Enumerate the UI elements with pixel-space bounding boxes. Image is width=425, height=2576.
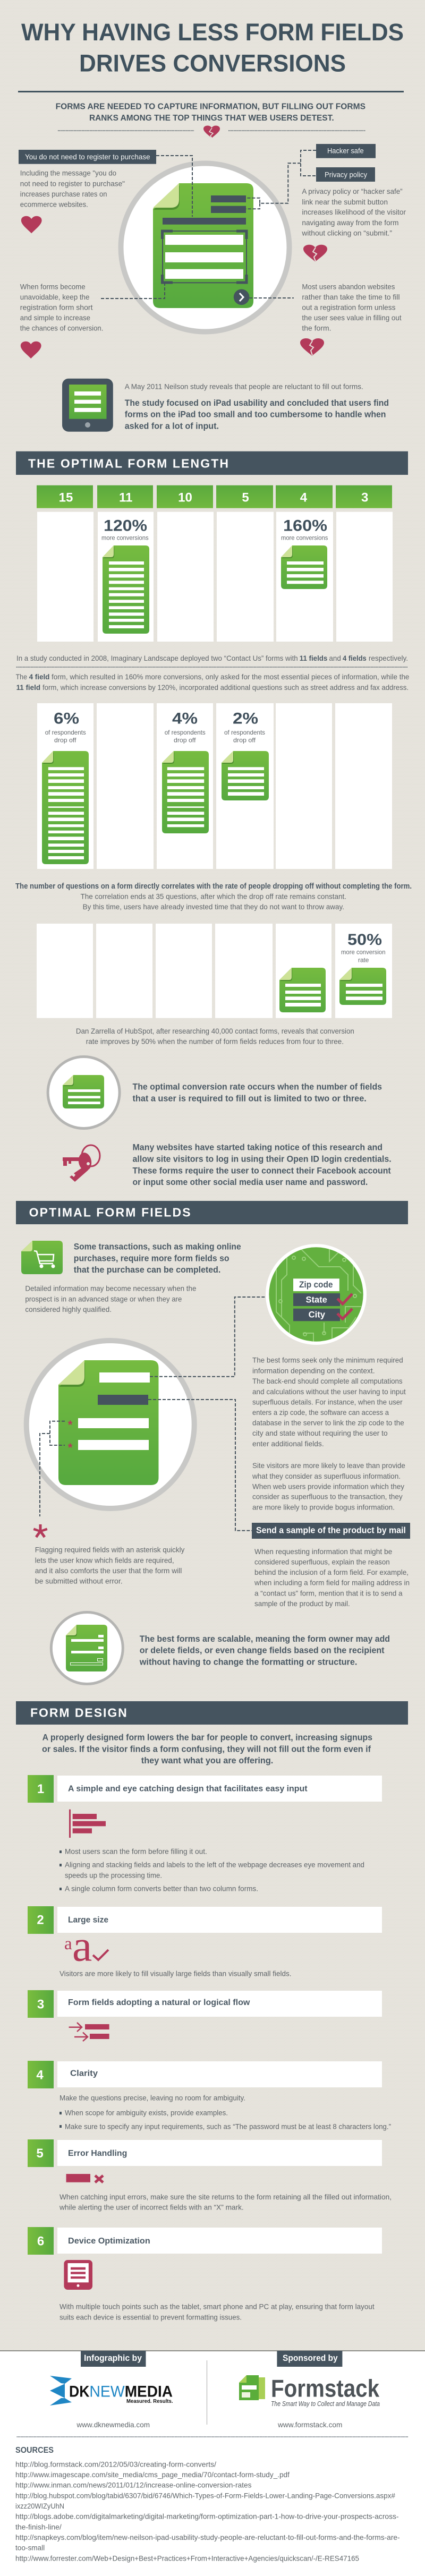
text: scalable forms [139,1634,390,1667]
stat: 50%: rate [358,956,369,963]
stat: 4%: of respondents [165,729,206,736]
stat: 120%: more conversions [101,534,149,542]
text: source links: http://www.imagescape.com/site_media/cms_page_media/70/contact-form-study_.pdf [15,2470,290,2479]
icon: three field form [339,968,386,1005]
stat: 120%: 120% [104,517,147,534]
logo: DK New Media: MEDIA [125,2383,173,2400]
text: superfluous explanation: considered superfluous, explain the reason [254,1558,390,1566]
logo: DK New Media: NEW [89,2383,125,2400]
text: best forms: consider as superfluous to the transaction, they [252,1492,403,1501]
stat: 4% [165,710,206,744]
field: state [293,1293,340,1306]
stat: 160% [281,517,328,542]
required asterisks: * [68,1441,73,1454]
stat: 2%: of respondents [224,729,265,736]
text: form design intro: A properly designed form lowers the bar for people to convert, increasing signups [42,1733,372,1743]
text: best forms: city and state without requiring the user to [252,1429,388,1437]
text: error handling [59,2193,392,2212]
text: users abandon: rather than take the time to fill [302,293,400,301]
text: source links: http://www.inman.com/news/2011/01/12/increase-online-conversion-rates [15,2481,252,2489]
text: footer urls [76,2420,342,2429]
required asterisks: * [68,1418,73,1431]
field: state: State [306,1295,327,1304]
icon: arrows to fields [69,2023,109,2041]
step 4 heading: 4 [36,2068,44,2082]
text: best forms: enter additional fields. [252,1439,324,1448]
text: best forms [252,1356,406,1512]
text: privacy policy: without clicking on “submit.” [301,229,392,237]
field: city: City [309,1310,326,1319]
text: superfluous explanation [254,1547,410,1608]
chart: conversion rate columns [37,924,392,1018]
icon: short form [222,751,269,800]
text: drop off correlation: The correlation ends at 35 questions, after which the drop off rate remains constant. [81,892,346,901]
subtitle [56,103,366,123]
text: keep form short: registration form short [20,303,93,311]
section heading: form design: FORM DESIGN [30,1706,127,1720]
text: optimal conversion rate [133,1082,382,1103]
text: privacy policy: link near the submit button [302,198,388,206]
text: step 1 bullets [60,1847,364,1893]
icon: left aligned bars [69,1810,106,1838]
step 1 heading: 1 [37,1782,44,1796]
text: Nielson study: forms on the iPad too small and too cumbersome to handle when [125,410,386,420]
text: imaginary landscape study: In a study conducted in 2008, Imaginary Landscape deployed two “Contact Us” forms with [16,654,298,662]
stat: 2%: drop off [233,737,256,744]
text: register message: not need to register to purchase" [20,180,125,188]
callout: send a sample [252,1523,410,1539]
text: register message: Including the message "you do [20,169,116,177]
label: infographic by: Infographic by [84,2353,142,2363]
icon: four field form [279,968,326,1012]
text: clarity: When scope for ambiguity exists, provide examples. [65,2109,228,2117]
text: best forms: database in the server to link the zip code to the [252,1418,404,1427]
subtitle: RANKS AMONG THE TOP THINGS THAT WEB USERS DETEST. [89,114,334,123]
text: keep form short: When forms become [20,282,86,291]
text: privacy policy: A privacy policy or “hacker safe” [302,187,403,195]
text: footer urls: www.dknewmedia.com [76,2420,150,2429]
text: detailed information: considered highly qualified. [25,1305,112,1313]
icon: heart [21,216,42,233]
text: users abandon: the form. [302,324,332,332]
icon: asterisk [33,1524,48,1538]
text: error handling: When catching input errors, make sure the site returns to the form retaining all the filled out information, [60,2193,392,2201]
text: register message: ecommerce websites. [20,200,88,209]
chart: field count headers: 3 [361,491,368,505]
label: privacy policy: Privacy policy [325,170,367,178]
text: field comparison: 11 field [16,683,40,692]
icon: tall form [42,751,89,864]
chart: drop off columns [37,703,392,869]
stat: 6%: drop off [54,737,76,744]
step 2 heading: Large size [68,1915,108,1924]
step 6 heading: Device Optimization [68,2237,150,2246]
icon: form with 11 fields [103,545,149,634]
text: online purchases: Some transactions, such as making online [74,1242,241,1252]
stat: 2% [224,710,265,744]
text: best forms: Site visitors are more likely to leave than provide [252,1461,405,1470]
step 1 heading: A simple and eye catching design that facilitates easy input [68,1785,308,1794]
text: keep form short: the chances of conversion. [20,324,103,332]
text: keep form short: and simple to increase [20,313,90,322]
field: city [293,1309,340,1321]
section heading: the optimal form length: THE OPTIMAL FORM LENGTH [28,456,228,470]
text: flagging required fields: and it also comforts the user that the form will [35,1566,182,1575]
text: best forms: and calculations without the user having to input [252,1387,406,1396]
logo: Formstack [239,2374,380,2408]
text: users abandon: Most users abandon websites [302,282,395,291]
text: step 1 bullets: Aligning and stacking fields and labels to the left of the webpage decreases eye movement and [65,1861,364,1869]
green form document [153,183,253,308]
step 4 heading: Clarity [70,2069,98,2078]
field: zip code: Zip code [299,1280,333,1290]
text: Nielson study: A May 2011 Neilson study reveals that people are reluctant to fill out forms. [125,382,363,391]
text: Dan Zarrella: rate improves by 50% when the number of form fields reduces from four to three. [86,1037,344,1046]
text: privacy policy: navigating away from the form [302,218,398,227]
text: scalable forms: without having to change the formatting or structure. [139,1657,357,1667]
section heading: optimal form fields: OPTIMAL FORM FIELDS [29,1206,191,1219]
text: open id [133,1143,392,1187]
icon: tablet [62,379,113,432]
text: privacy policy [301,187,406,237]
text: clarity [60,2094,391,2130]
label: privacy policy [316,167,375,182]
step 2 heading [28,1906,382,1934]
text: best forms: what they consider as superfluous information. [252,1472,401,1480]
icon: small and large a with check [64,1922,108,1971]
text: users abandon [302,282,402,332]
panel: footer [0,2350,425,2576]
stat: 4%: drop off [174,737,196,744]
text: keep form short [20,282,103,332]
text: flagging required fields: Flagging required fields with an asterisk quickly [35,1546,184,1554]
stat: 50%: more conversion [341,949,386,956]
chart: field count headers: 5 [242,491,249,505]
text: detailed information: Detailed information may become necessary when the [25,1284,197,1293]
step 5 heading [28,2139,382,2167]
text: register message: increases purchase rates on [20,190,107,198]
text: imaginary landscape study: 4 fields [343,654,367,662]
text: best forms: The best forms seek only the minimum required [252,1356,403,1364]
label: hacker safe: Hacker safe [327,146,364,155]
text: device optimization: suits each device is essential to prevent formatting issues. [60,2313,242,2321]
title rule [18,91,404,92]
text: scalable forms: or delete fields, or even change fields based on the recipient [140,1646,385,1656]
text: online purchases [74,1242,241,1275]
callout: send a sample: Send a sample of the product by mail [256,1526,406,1536]
chart: field count headers: 15 [59,491,73,505]
icon: heart [21,342,41,359]
text: imaginary landscape study: 11 fields [300,654,327,662]
stat: 2%: 2% [233,710,258,727]
logo: DK New Media: Measured. Results. [126,2399,173,2404]
text: step 1 bullets: A single column form converts better than two column forms. [65,1884,258,1893]
icon: broken heart divider [203,125,220,138]
icon: shopping cart form [21,1241,63,1274]
text: field comparison: form, which increase conversions by 120%, incorporated additional questions such as street address and fax address. [42,683,409,692]
chart: field count headers: 11 [119,491,132,505]
icon: field with x [66,2174,103,2182]
icon: circled three field form [48,1057,120,1128]
text: field comparison: form, which resulted in 160% more conversions, only asked for the most essential pieces of information, while the [52,672,410,681]
icon: scalable form circle [51,1613,123,1684]
subtitle: FORMS ARE NEEDED TO CAPTURE INFORMATION, BUT FILLING OUT FORMS [56,103,366,112]
field: zip code [293,1278,339,1291]
text: source links: http://blog.formstack.com/2012/05/03/creating-form-converts/ [15,2460,216,2468]
text: optimal conversion rate: The optimal conversion rate occurs when the number of fields [133,1082,382,1092]
icon: broken heart [300,338,324,356]
logo: DK New Media: DK [69,2383,90,2400]
text: Nielson study: asked for a lot of input. [125,421,219,431]
text: drop off correlation [15,882,412,911]
required asterisks [68,1418,73,1454]
text: clarity: Make the questions precise, leaving no room for ambiguity. [60,2094,245,2102]
icon: keys [63,1145,100,1182]
text: source links: ixzz20WIZyUhN [15,2502,64,2510]
text: source links: http://blog.hubspot.com/blog/tabid/6307/bid/6746/Which-Types-of-Form-Fields-Lower-Landing-Page-Conversions.aspx# [15,2491,395,2500]
text: flagging required fields: be submitted without error. [35,1577,123,1585]
text: best forms: The back-end should complete all computations [252,1377,403,1385]
label: infographic by [81,2351,146,2367]
label: hacker safe [316,144,376,158]
label: sponsored by: Sponsored by [283,2353,338,2363]
stat: 6%: of respondents [45,729,86,736]
text: field comparison [16,672,410,692]
text: Dan Zarrella [76,1027,354,1046]
label: you do not need to register [19,150,156,164]
stat: 6% [45,710,86,744]
text: users abandon: the user sees value in filling out [302,313,402,322]
chart: field count headers [37,485,392,508]
text: source links: the-finish-line/ [15,2522,62,2531]
panel: large form circle [27,1341,194,1508]
step 4 heading [28,2061,382,2088]
text: keep form short: unavoidable, keep the [20,293,90,301]
text: users abandon: out a registration form unless [302,303,395,311]
text: register message [20,169,125,209]
text: large fields: Visitors are more likely to fill visually large fields than visually small fields. [60,1969,291,1978]
label: sponsored by [277,2351,342,2367]
stat: 160%: more conversions [281,534,328,542]
stat: 50%: 50% [347,931,382,949]
text: flagging required fields: lets the user know which fields are required, [35,1556,174,1564]
step 1 heading [28,1775,382,1803]
text: open id: These forms require the user to connect their Facebook account [133,1166,391,1175]
step 6 heading: 6 [37,2234,44,2248]
logo: Formstack: The Smart Way to Collect and Manage Data [271,2400,380,2408]
stat: 120% [101,517,149,542]
text: step 1 bullets: speeds up the processing time. [65,1871,162,1880]
text: drop off correlation: By this time, users have already invested time that they do not want to throw away. [83,902,344,911]
icon: red tablet [64,2260,92,2290]
green form document [58,1360,158,1485]
text: clarity: Make sure to specify any input requirements, such as “The password must be at least 8 characters long.” [65,2122,391,2130]
label: you do not need to register: You do not need to register to purchase [25,152,150,161]
icon: broken heart [303,245,327,262]
text: form design intro: or sales. If the visitor finds a form confusing, they will not fill out the form even if [42,1744,371,1754]
text: imaginary landscape study: and [329,654,341,662]
step 5 heading: 5 [36,2146,44,2161]
text: best forms: enters a zip code, the software can access a [252,1408,389,1417]
text: Dan Zarrella: Dan Zarrella of HubSpot, after researching 40,000 contact forms, reveals that conversion [76,1027,354,1035]
icon: checks [337,1294,352,1319]
connector dashes [101,150,316,298]
section heading: form design [16,1701,408,1725]
text: form design intro [42,1733,372,1765]
panel: form diagram circle [121,164,289,331]
text: form design intro: they want what you are offering. [141,1756,273,1765]
text: device optimization: With multiple touch points such as the tablet, smart phone and PC at play, ensuring that form layout [60,2302,375,2311]
chart: field count headers: 4 [300,491,308,505]
text: online purchases: that the purchase can be completed. [74,1265,220,1275]
text: Nielson study [125,382,389,431]
text: superfluous explanation: sample of the product by mail. [254,1599,350,1608]
step 5 heading: Error Handling [68,2149,127,2158]
text: scalable forms: The best forms are scalable, meaning the form owner may add [140,1634,390,1644]
text: best forms: are more likely to provide bogus information. [252,1503,395,1512]
step 6 heading [28,2227,382,2255]
section heading: optimal form fields [16,1201,408,1224]
text: source links: http://blogs.adobe.com/digitalmarketing/digital-marketing/form-optimization-part-1-how-to-drive-your-prospects-across- [15,2512,399,2521]
text: source links [15,2460,400,2562]
text: superfluous explanation: a “contact us” form, mention that it is to send a [254,1589,403,1598]
text: field comparison: 4 field [29,672,49,681]
text: open id: or input some other social media user name and password. [133,1178,368,1187]
step 3 heading [28,1990,382,2018]
text: optimal conversion rate: that a user is required to fill out is limited to two or three. [133,1094,367,1103]
chart: conversion columns [37,512,393,642]
connector dashes [40,1297,265,1531]
text: detailed information: prospect is in an advanced stage or when they are [25,1295,182,1303]
text: superfluous explanation: behind the inclusion of a form field. For example, [254,1568,409,1576]
text: source links: http://www.forrester.com/Web+Design+Best+Practices+From+Interactive+Agencies/quickscan/-/E-RES47165 [15,2554,359,2562]
logo: Formstack: Formstack [271,2374,379,2402]
circuit pattern [276,1246,361,1344]
text: step 1 bullets: Most users scan the form before filling it out. [65,1847,207,1856]
text: privacy policy: increases likelihood of the visitor [302,208,406,216]
section heading: the optimal form length [16,451,408,475]
text: Nielson study: The study focused on iPad usability and concluded that users find [125,398,389,408]
circle backdrop [121,164,289,331]
stat: 6%: 6% [54,710,79,727]
text: open id: allow site visitors to log in using their Open ID login credentials. [133,1155,392,1164]
text: device optimization [60,2302,375,2321]
heading: sources: SOURCES [15,2446,54,2455]
text: best forms: superfluous details. For instance, when the user [252,1397,403,1406]
icon: small and large a with check: a [64,1934,72,1954]
text: superfluous explanation: When requesting information that might be [254,1547,393,1556]
text: open id: Many websites have started taking notice of this research and [133,1143,382,1153]
text: error handling: while alerting the user of incorrect fields with an “X” mark. [59,2203,244,2212]
text: footer urls: www.formstack.com [277,2420,342,2429]
text: source links: too-small [15,2544,45,2552]
text: detailed information [25,1284,197,1313]
text: flagging required fields [35,1546,184,1585]
icon: form with 4 fields [281,545,327,589]
text: imaginary landscape study: respectively. [369,654,408,662]
text: best forms: When web users provide information which they [252,1482,404,1490]
step 2 heading: 2 [37,1913,44,1927]
title: DRIVES CONVERSIONS [79,50,346,76]
icon: medium form [162,751,209,833]
step 3 heading: 3 [37,1997,44,2011]
text: best forms: information depending on the context. [252,1367,375,1375]
text: source links: http://snapkeys.com/blog/item/new-neilson-ipad-usability-study-people-are-reluctant-to-fill-out-forms-and-the-forms-are- [15,2533,400,2541]
title: WHY HAVING LESS FORM FIELDS [21,19,404,46]
stat: 50% [341,931,386,963]
chart: field count headers: 10 [178,491,192,505]
stat: 4%: 4% [172,710,198,727]
text: field comparison: The [16,672,27,681]
text: superfluous explanation: when including a form field for mailing address in [254,1579,410,1587]
text: online purchases: purchases, require more form fields so [74,1254,230,1264]
panel: zip code circle [266,1244,367,1345]
step 3 heading: Form fields adopting a natural or logical flow [68,1998,250,2007]
title [21,19,404,76]
icon: small and large a with check: a [72,1922,92,1971]
stat: 160%: 160% [283,517,327,534]
logo: DK New Media [50,2376,173,2406]
